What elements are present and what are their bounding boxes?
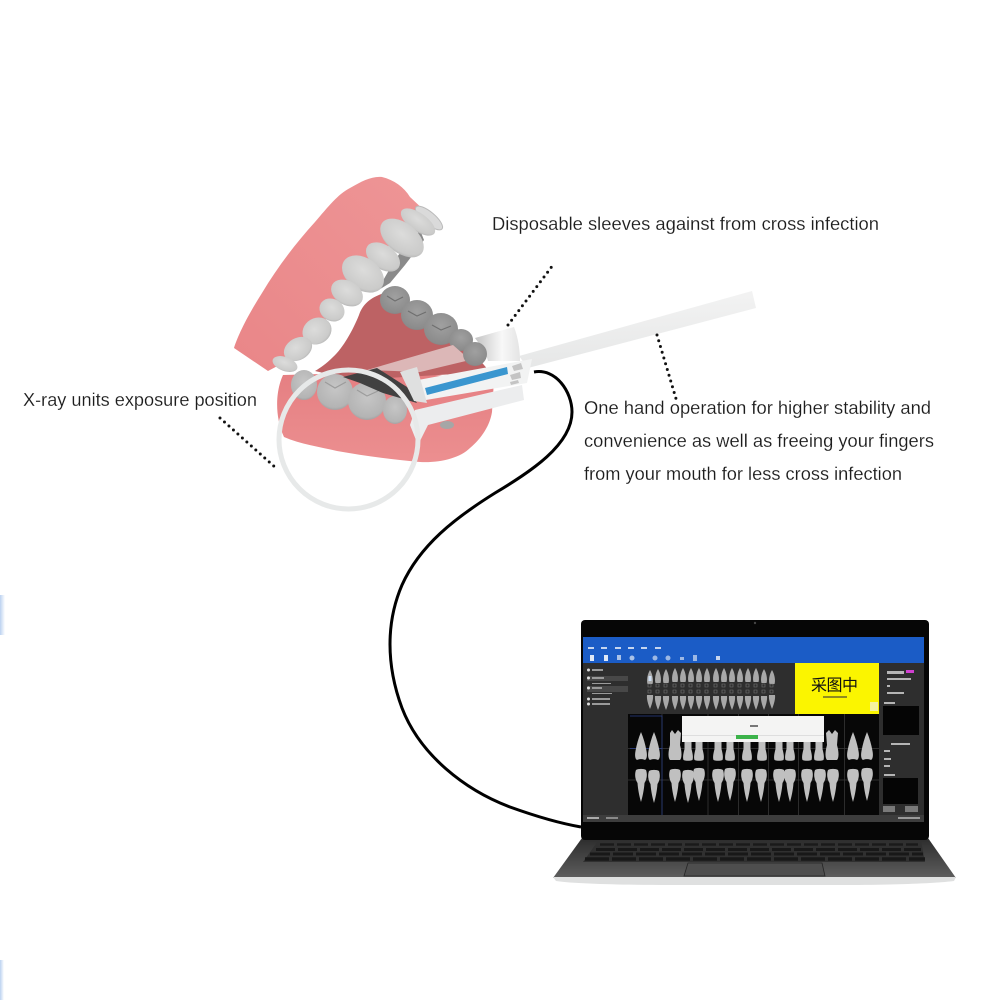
- last far molar in front of sleeve: [463, 342, 487, 366]
- title and tool bar: [583, 637, 924, 663]
- tooth selector checkboxes: [648, 684, 773, 693]
- translucent plate: [367, 345, 470, 372]
- silver front edge: [553, 877, 956, 885]
- far lower molars: [380, 286, 473, 351]
- back upper teeth: [377, 230, 424, 291]
- leader: exposure position: [220, 418, 276, 468]
- upper gum: [234, 177, 426, 371]
- lower support arm: [410, 385, 524, 445]
- tooth selector lower row: [647, 695, 775, 710]
- left sidebar list: [587, 668, 628, 706]
- blue sensor strip: [425, 367, 508, 395]
- status bar: [583, 815, 924, 822]
- upper tooth images: [635, 730, 873, 761]
- menu items: [588, 647, 661, 649]
- sensor cable: [390, 372, 581, 827]
- x-ray chart: [628, 714, 879, 815]
- lower gum: [277, 372, 494, 462]
- label: one hand operation: from your mouth for less cross infection: [584, 464, 902, 484]
- trackpad: [684, 863, 825, 876]
- lower tooth images: [635, 768, 873, 803]
- label: one hand operation: convenience as well as freeing your fingers: [584, 431, 934, 451]
- dark shadow under plate: [343, 368, 417, 403]
- screen bezel: [581, 620, 929, 840]
- circular aiming ring: [279, 370, 418, 509]
- laptop: [553, 620, 956, 885]
- long handle: [519, 291, 756, 368]
- keyboard: [583, 841, 925, 862]
- leader: sleeves: [508, 265, 553, 325]
- label: one hand operation: One hand operation for higher stability and: [584, 398, 931, 418]
- left-edge blue artefact (upper): [0, 595, 5, 635]
- positioning device: [279, 291, 756, 509]
- app background: [583, 663, 924, 822]
- label: exposure position: X-ray units exposure position: [23, 390, 257, 410]
- holder vertical tab: [400, 367, 427, 403]
- webcam: [754, 622, 756, 624]
- mouth interior: [315, 293, 490, 380]
- holder tabs: [510, 363, 523, 385]
- yellow acquiring panel: 采图中: [811, 676, 858, 694]
- sensor sleeve cylinder: [475, 327, 520, 361]
- label: one hand operation: [584, 398, 934, 484]
- left-edge blue artefact (lower): [0, 960, 4, 1000]
- laptop deck: [553, 838, 956, 878]
- label: sleeves: Disposable sleeves against from cross infection: [492, 214, 879, 234]
- upper teeth: [270, 202, 446, 375]
- app window: [583, 637, 924, 822]
- near lower molars: [291, 370, 407, 424]
- leader: handle: [657, 335, 677, 402]
- toolbar icons: [590, 655, 720, 661]
- progress dialog: [682, 716, 824, 742]
- far tooth below arm: [440, 421, 454, 429]
- dental model: [234, 177, 494, 462]
- sensor holder: [418, 359, 532, 401]
- yellow acquiring panel: [795, 663, 879, 714]
- tooth selector upper row: [647, 668, 775, 684]
- right info panel: [883, 670, 919, 812]
